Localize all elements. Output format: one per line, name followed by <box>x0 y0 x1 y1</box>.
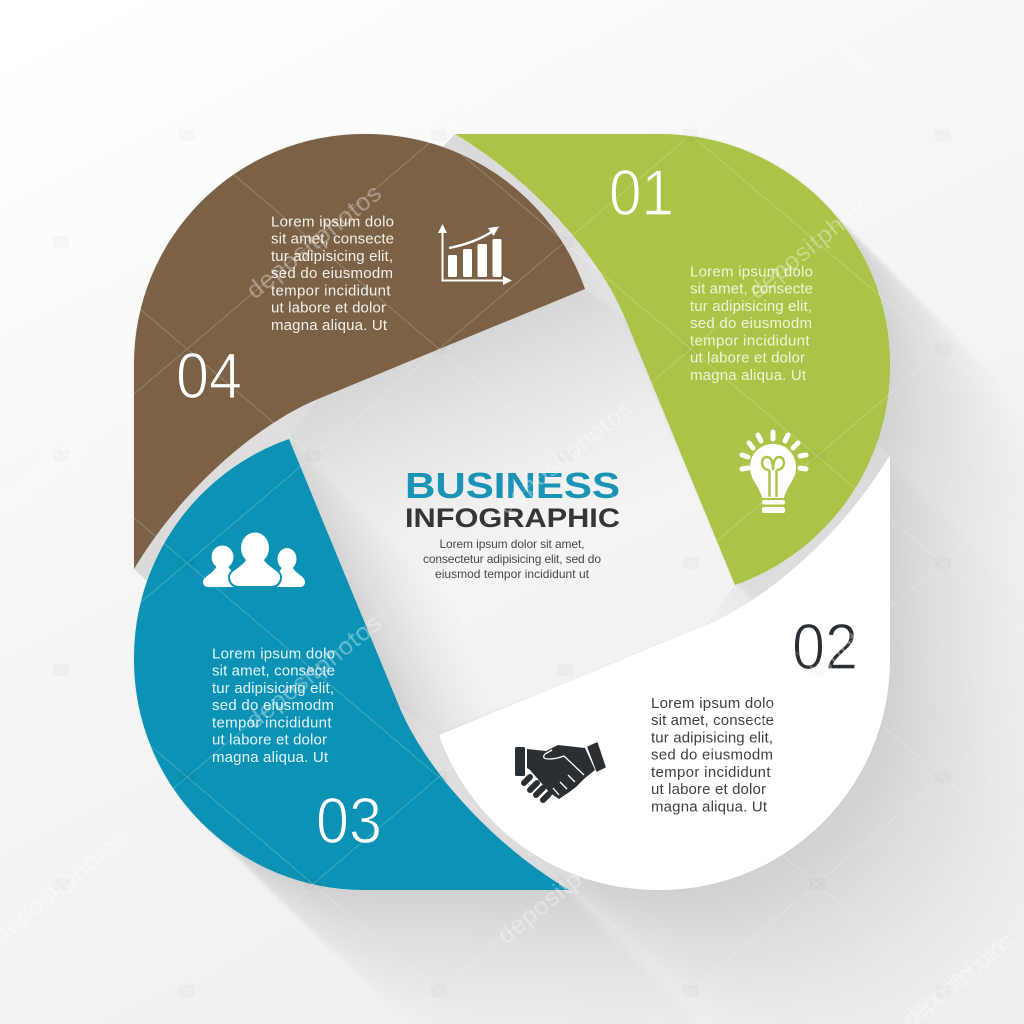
text block: segment 01: sit amet, consecte <box>690 281 813 298</box>
text block: segment 03 <box>212 646 335 766</box>
text block: segment 04: sed do eiusmodm <box>271 265 393 282</box>
number 01: 01 <box>609 156 674 229</box>
number 03: 03 <box>316 784 382 857</box>
panel: segment 01 green <box>455 134 890 585</box>
stock watermark text: depositphotos <box>743 609 889 735</box>
icon: handshake <box>515 743 605 800</box>
text block: centre description: Lorem ipsum dolor sit amet, <box>440 537 584 551</box>
stock watermark text: depositphotos <box>492 394 638 520</box>
text block: segment 01: magna aliqua. Ut <box>690 367 807 384</box>
icon: people group <box>203 532 305 587</box>
title: INFOGRAPHIC: INFOGRAPHIC <box>405 503 620 533</box>
text block: segment 02: tur adipisicing elit, <box>651 730 773 746</box>
text block: segment 01: sed do eiusmodm <box>690 315 812 332</box>
text block: segment 03: ut labore et dolor <box>212 732 327 749</box>
text block: centre description <box>423 537 601 581</box>
text block: segment 02: tempor incididunt <box>651 764 771 781</box>
text block: segment 04: tur adipisicing elit, <box>271 248 393 265</box>
stock watermark text: depositphotos <box>743 179 889 305</box>
text block: segment 02: sit amet, consecte <box>651 712 774 729</box>
text block: segment 03: magna aliqua. Ut <box>212 749 329 766</box>
text block: segment 04 <box>271 214 394 334</box>
text block: segment 02: ut labore et dolor <box>651 781 766 798</box>
panel: segment 02 white <box>439 455 890 890</box>
text block: segment 03: tempor incididunt <box>212 714 332 732</box>
text block: segment 03: Lorem ipsum dolo <box>212 646 335 662</box>
stock watermark text: depositphotos <box>241 179 387 305</box>
text block: segment 04: Lorem ipsum dolo <box>271 214 394 230</box>
text block: segment 02 <box>651 695 774 816</box>
panel: segment 04 brown <box>134 134 585 569</box>
number 02: 02 <box>792 610 858 683</box>
text block: segment 02: magna aliqua. Ut <box>651 798 768 816</box>
text block: segment 03: tur adipisicing elit, <box>212 680 334 697</box>
text block: segment 04: magna aliqua. Ut <box>271 317 388 334</box>
text block: centre description: eiusmod tempor incididunt ut <box>435 567 590 581</box>
icon: bar chart <box>438 224 512 285</box>
icon: light bulb <box>742 432 806 513</box>
text block: segment 01: tempor incididunt <box>690 332 810 350</box>
number 04: 04 <box>176 339 242 412</box>
text block: segment 01 <box>690 264 813 384</box>
long drop shadow of the segments <box>146 150 988 988</box>
panel: segment 03 blue <box>134 439 569 890</box>
text block: segment 01: ut labore et dolor <box>690 350 805 367</box>
title: BUSINESS: BUSINESS <box>405 465 620 506</box>
grey gaps between segments <box>134 134 890 890</box>
text block: segment 03: sed do eiusmodm <box>212 697 334 714</box>
text block: segment 04: tempor incididunt <box>271 282 391 300</box>
text block: segment 03: sit amet, consecte <box>212 663 335 680</box>
stock watermark camera marks <box>53 129 951 997</box>
text block: segment 01: Lorem ipsum dolo <box>690 264 813 280</box>
text block: segment 04: sit amet, consecte <box>271 231 394 248</box>
text block: segment 02: Lorem ipsum dolo <box>651 695 774 712</box>
stock watermark text: depositphotos <box>241 609 387 735</box>
stock watermark text: depositphotos <box>492 824 638 950</box>
text block: segment 01: tur adipisicing elit, <box>690 298 812 315</box>
text block: segment 02: sed do eiusmodm <box>651 747 773 764</box>
text block: centre description: consectetur adipisicing elit, sed do <box>423 552 601 566</box>
text block: segment 04: ut labore et dolor <box>271 300 386 317</box>
